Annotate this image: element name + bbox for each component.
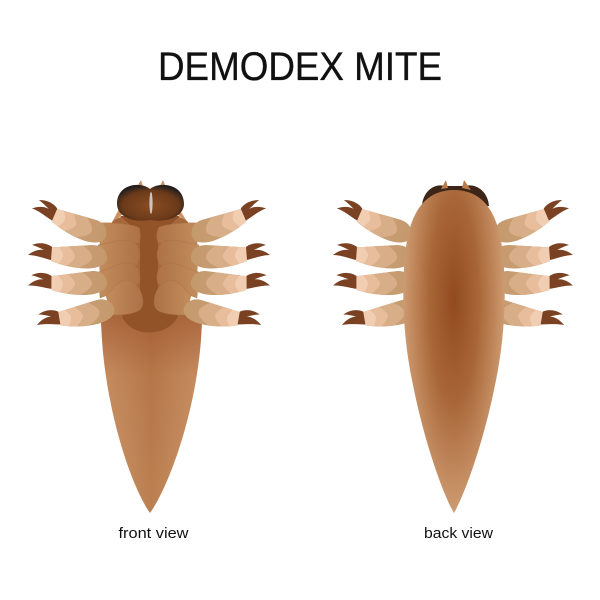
back view head — [422, 185, 489, 206]
back view right legs — [481, 196, 575, 342]
front view tail shading — [101, 316, 202, 513]
front view left legs — [26, 196, 120, 342]
back view mouth spikes — [441, 180, 471, 190]
front view head — [117, 185, 184, 221]
front view right coxae — [154, 223, 199, 315]
front view tail — [101, 316, 202, 513]
front view left coxae — [98, 223, 143, 315]
title: DEMODEX MITE — [158, 45, 442, 89]
back view label: back view — [424, 526, 494, 542]
front view thorax — [112, 213, 190, 318]
front view mouth spikes — [110, 180, 190, 226]
front view right legs — [178, 196, 272, 342]
front view mite — [26, 180, 272, 513]
back view mite — [331, 180, 575, 513]
back view body — [403, 190, 505, 513]
front view central stripe — [120, 216, 180, 332]
back view left legs — [331, 196, 425, 342]
front view label: front view — [118, 526, 189, 542]
front view head slit — [149, 192, 153, 214]
